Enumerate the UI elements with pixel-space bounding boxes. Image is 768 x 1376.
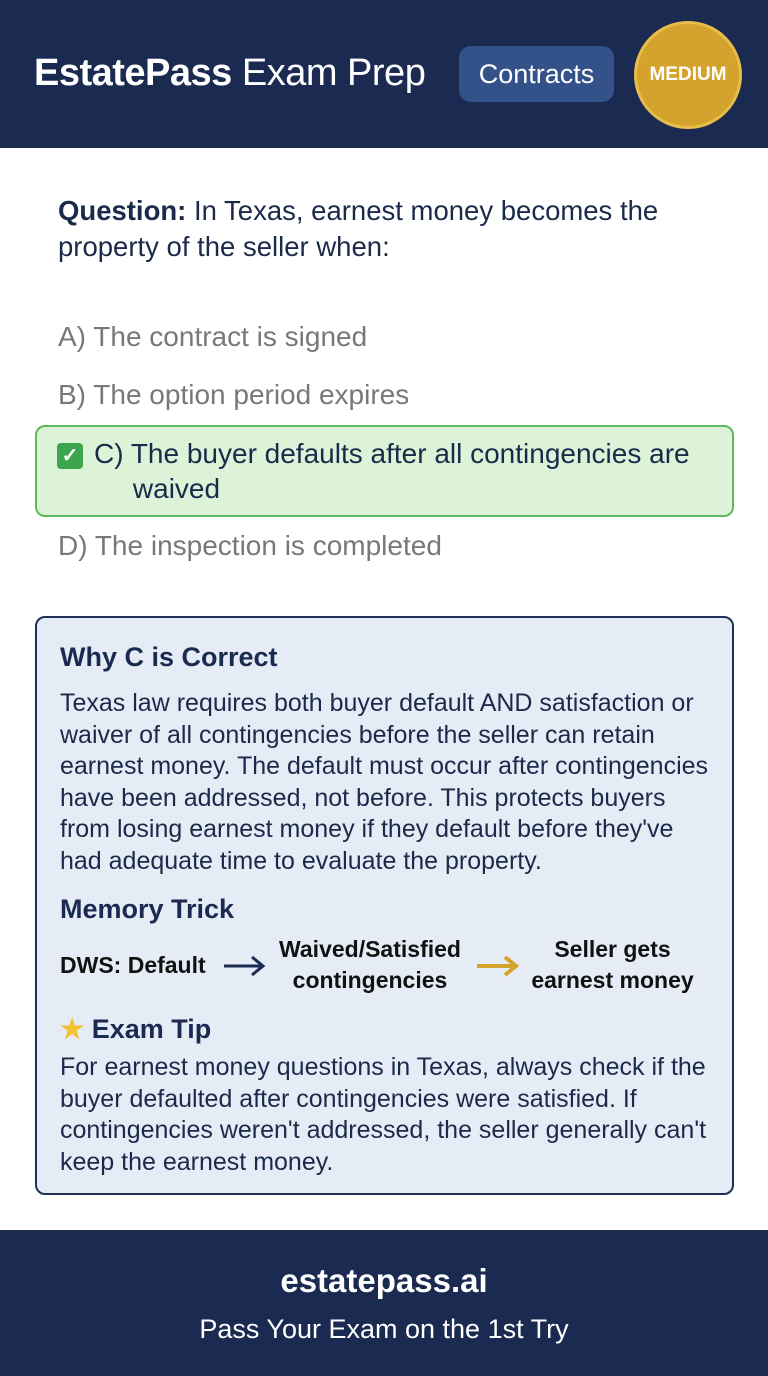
arrow 1 <box>224 956 266 976</box>
header <box>0 0 768 148</box>
difficulty badge: MEDIUM <box>649 64 727 85</box>
option B: B) The option period expires <box>58 379 409 410</box>
tip text: For earnest money questions in Texas, always check if the buyer defaulted after contingencies were satisfied. If contingencies weren't addressed, the seller generally can't keep the earnest money. <box>60 1053 706 1176</box>
memory flow: contingencies <box>293 967 447 993</box>
heading: why correct: Why C is Correct <box>60 642 278 672</box>
footer site: estatepass.ai <box>280 1262 488 1299</box>
option C text: waived <box>133 473 220 504</box>
option C text <box>94 438 690 504</box>
difficulty badge <box>634 21 742 129</box>
heading: exam tip: ★ Exam Tip <box>60 1014 211 1044</box>
memory flow: DWS: Default <box>60 952 206 978</box>
explanation text: Texas law requires both buyer default AND satisfaction or waiver of all contingencies before the seller can retain earnest money. The default must occur after contingencies have been addressed, not before. This protects buyers from losing earnest money if they default before they've had adequate time to evaluate the property. <box>60 689 708 874</box>
panel: explanation <box>35 616 734 1195</box>
category badge <box>459 46 614 102</box>
arrow 2 <box>477 956 520 976</box>
memory flow: Waived/Satisfied <box>279 936 461 962</box>
option C text: C) The buyer defaults after all contingencies are <box>94 438 690 469</box>
title: EstatePass Exam Prep <box>34 52 425 94</box>
icon: check <box>57 443 83 469</box>
option A: A) The contract is signed <box>58 321 367 352</box>
question: Question: In Texas, earnest money becomes the property of the seller when: <box>58 195 658 262</box>
footer <box>0 1230 768 1376</box>
option C correct <box>35 425 734 517</box>
icon: check: ✓ <box>62 445 78 467</box>
footer tagline: Pass Your Exam on the 1st Try <box>199 1314 569 1344</box>
memory flow: earnest money <box>531 967 694 993</box>
category badge: Contracts <box>479 59 594 89</box>
memory flow: Seller gets <box>554 936 671 962</box>
memory flow <box>60 936 694 993</box>
option D: D) The inspection is completed <box>58 530 442 561</box>
heading: memory trick: Memory Trick <box>60 894 234 924</box>
